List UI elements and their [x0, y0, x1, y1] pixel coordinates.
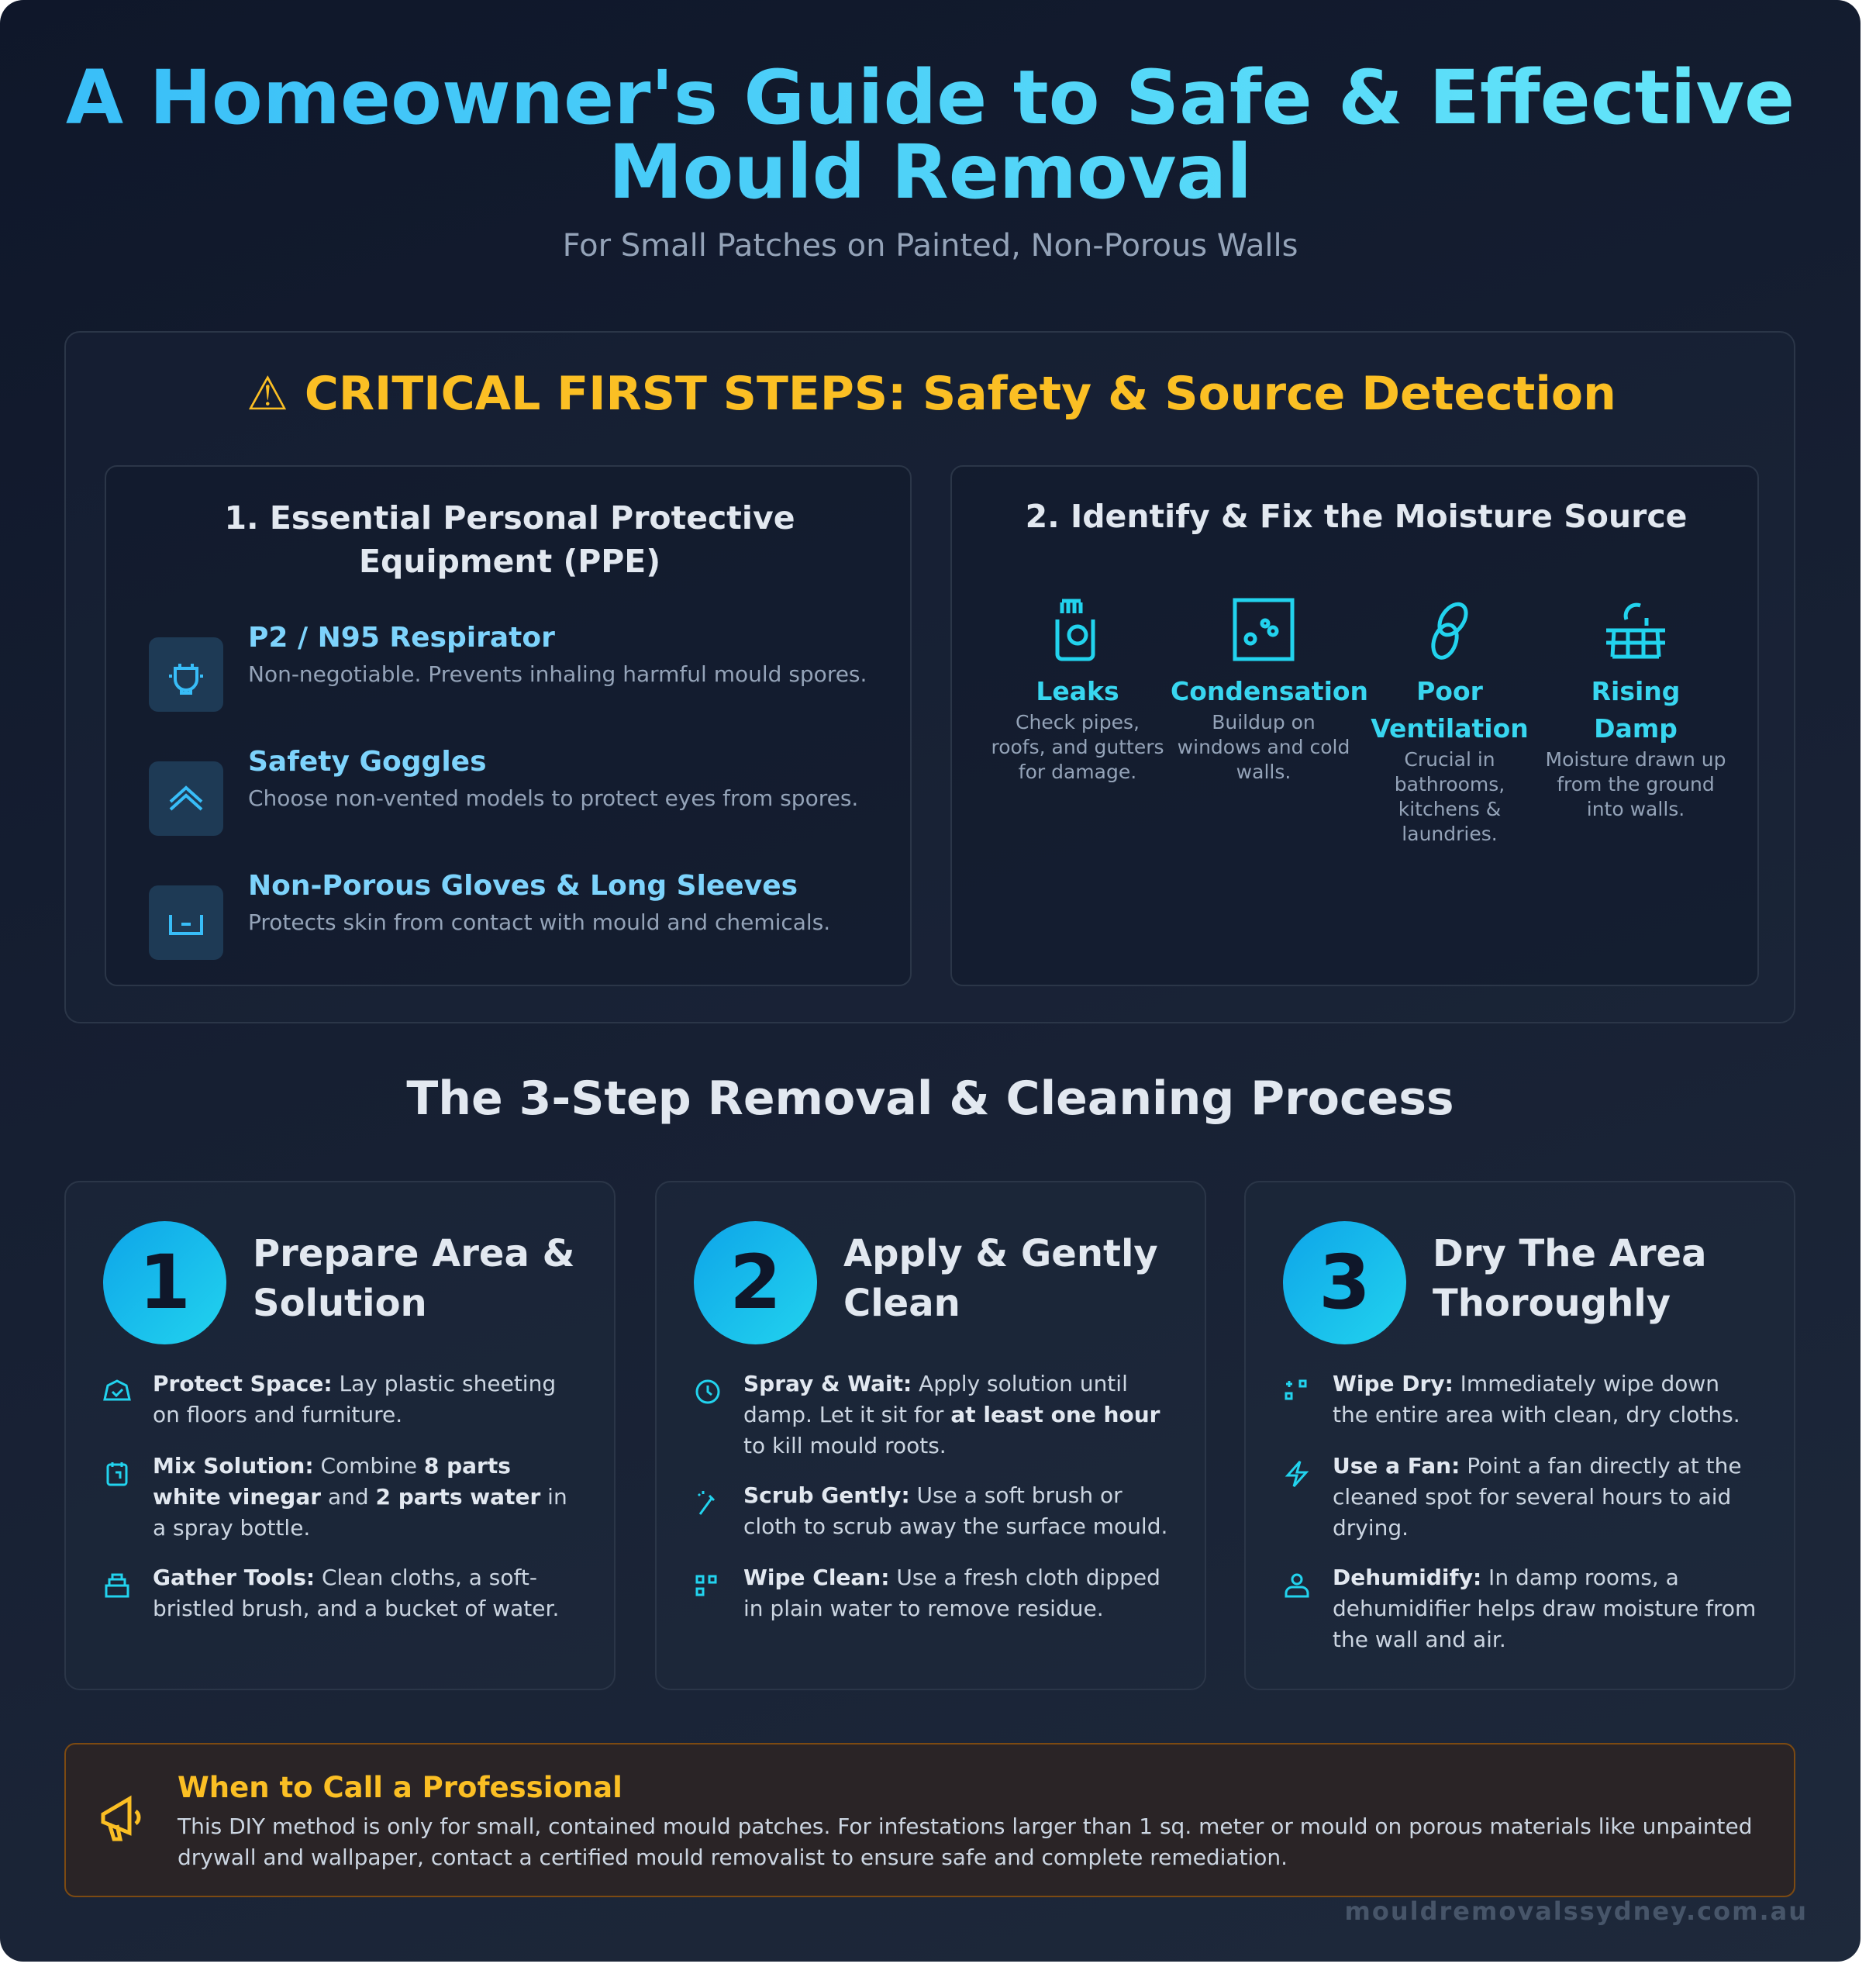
- bullet: dehumidify: Dehumidify: In damp rooms, a dehumidifier helps draw moisture from the wall and air.: [1333, 1565, 1756, 1652]
- item: leaks: Check pipes, roofs, and gutters for damage.: [991, 711, 1164, 783]
- step title: Dry The Area: [1433, 1232, 1706, 1275]
- heading: PPE: Equipment (PPE): [359, 543, 660, 580]
- item: goggles: Choose non-vented models to protect eyes from spores.: [248, 785, 858, 811]
- bullet: wipe: Wipe Clean: Use a fresh cloth dipped in plain water to remove residue.: [743, 1565, 1160, 1621]
- item: ventilation: Crucial in bathrooms, kitchens & laundries.: [1395, 748, 1505, 845]
- heading: moisture: 2. Identify & Fix the Moisture Source: [1026, 498, 1687, 535]
- callout: when to call a professional: [64, 1743, 1795, 1897]
- heading: 3-step process: The 3-Step Removal & Cleaning Process: [406, 1072, 1454, 1126]
- title: A Homeowner's Guide to Safe & Effective: [66, 54, 1795, 141]
- item: respirator: [149, 622, 867, 712]
- title: Mould Removal: [609, 129, 1252, 216]
- bullet: fan: Use a Fan: Point a fan directly at the cleaned spot for several hours to aid drying.: [1333, 1453, 1742, 1541]
- step title: Apply & Gently: [843, 1232, 1158, 1275]
- item: rising damp: Damp: [1594, 713, 1678, 744]
- bullet: mix: Mix Solution: Combine 8 parts white vinegar and 2 parts water in a spray bottle.: [153, 1453, 567, 1541]
- item: rising damp: Rising: [1591, 676, 1680, 706]
- callout title: When to Call a Professional: [178, 1771, 622, 1804]
- step title: [253, 1232, 574, 1325]
- number 3: 3: [1319, 1239, 1371, 1326]
- subtitle: For Small Patches on Painted, Non-Porous Walls: [563, 228, 1298, 264]
- step title: Thoroughly: [1433, 1282, 1671, 1325]
- item: gloves: Protects skin from contact with mould and chemicals.: [248, 909, 830, 935]
- item: condensation: Condensation: [1171, 676, 1368, 706]
- item: rising damp: Moisture drawn up from the ground into walls.: [1546, 748, 1726, 820]
- step title: Clean: [843, 1282, 960, 1325]
- footer url: mouldremovalssydney.com.au: [1345, 1896, 1808, 1926]
- panel: step 1: [64, 1181, 616, 1690]
- item: ventilation: Ventilation: [1371, 713, 1529, 744]
- item: leaks: [991, 599, 1164, 783]
- step title: [843, 1232, 1158, 1325]
- item: condensation: Buildup on windows and cold walls.: [1178, 711, 1350, 783]
- bullet: scrub: Scrub Gently: Use a soft brush or cloth to scrub away the surface mould.: [743, 1482, 1167, 1539]
- number 1: [103, 1221, 226, 1344]
- item: leaks: Leaks: [1036, 676, 1119, 706]
- bullet: tools: Gather Tools: Clean cloths, a soft-bristled brush, and a bucket of water.: [153, 1565, 559, 1621]
- bullet: wipe dry: Wipe Dry: Immediately wipe down the entire area with clean, dry cloths.: [1333, 1371, 1740, 1427]
- bullet: spray: Spray & Wait: Apply solution until damp. Let it sit for at least one hour to kill mould roots.: [743, 1371, 1160, 1458]
- item: ventilation: [1371, 602, 1529, 845]
- number 3: [1283, 1221, 1406, 1344]
- panel: step 3: [1244, 1181, 1795, 1690]
- number 2: [694, 1221, 817, 1344]
- item: condensation: [1171, 599, 1368, 783]
- item: respirator: Non-negotiable. Prevents inhaling harmful mould spores.: [248, 661, 867, 687]
- item: goggles: Safety Goggles: [248, 746, 487, 778]
- item: gloves: Non-Porous Gloves & Long Sleeves: [248, 870, 798, 902]
- icon: megaphone: [101, 1796, 141, 1841]
- step title: Prepare Area &: [253, 1232, 574, 1275]
- item: gloves: [149, 870, 830, 960]
- heading: PPE: 1. Essential Personal Protective: [225, 499, 795, 537]
- callout text: This DIY method is only for small, contained mould patches. For infestations larger than 1 sq. meter or mould on porous materials like unpainted drywall and wallpaper, contact a certified mould removalist to ensure safe and complete remediation.: [178, 1814, 1753, 1870]
- panel: PPE: [105, 465, 912, 986]
- title: [0, 60, 1860, 209]
- item: rising damp: [1546, 603, 1726, 820]
- number 2: 2: [729, 1239, 781, 1326]
- number 1: 1: [139, 1239, 191, 1326]
- bullet: protect: Protect Space: Lay plastic sheeting on floors and furniture.: [153, 1371, 556, 1427]
- step title: [1433, 1232, 1706, 1325]
- heading: PPE: [225, 499, 795, 580]
- item: goggles: [149, 746, 858, 836]
- item: respirator: P2 / N95 Respirator: [248, 622, 555, 654]
- panel: step 2: [655, 1181, 1206, 1690]
- item: ventilation: Poor: [1416, 676, 1483, 706]
- heading: critical: ⚠ CRITICAL FIRST STEPS: Safety & Source Detection: [247, 367, 1616, 421]
- panel: critical first steps: [64, 331, 1795, 1023]
- step title: Solution: [253, 1282, 427, 1325]
- panel: moisture source: [950, 465, 1759, 986]
